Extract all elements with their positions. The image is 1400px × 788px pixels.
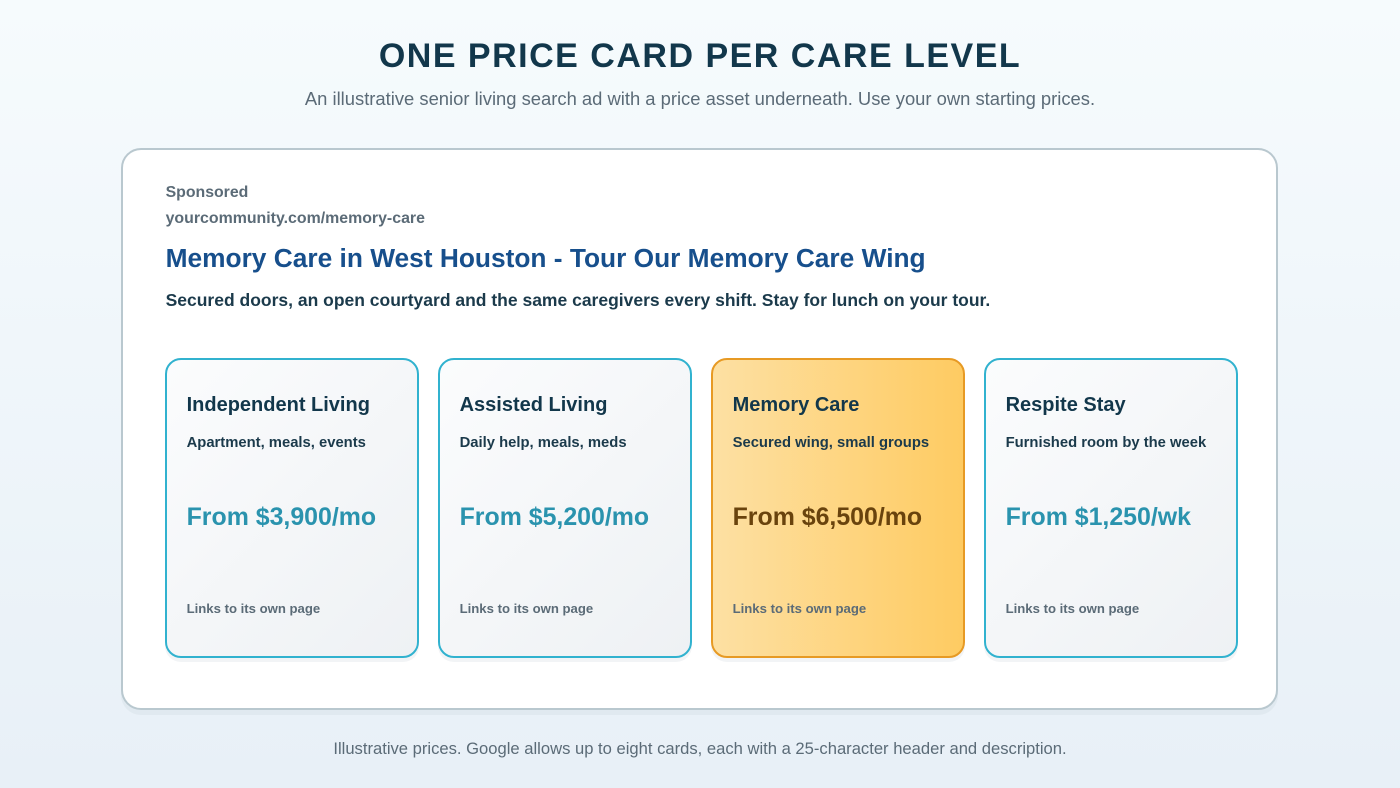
ad description: Secured doors, an open courtyard and the same caregivers every shift. Stay for lunch on your tour. xyxy=(166,290,990,310)
card description: Secured wing, small groups xyxy=(733,434,929,450)
footnote: Illustrative prices. Google allows up to eight cards, each with a 25-character header and description. xyxy=(333,739,1067,758)
card price: From $1,250/wk xyxy=(1006,503,1191,531)
title: ONE PRICE CARD PER CARE LEVEL xyxy=(379,37,1021,75)
ad headline: Memory Care in West Houston - Tour Our Memory Care Wing xyxy=(166,243,926,273)
subtitle: An illustrative senior living search ad with a price asset underneath. Use your own starting prices. xyxy=(305,88,1095,109)
card price: From $3,900/mo xyxy=(187,503,376,531)
card: respite stay xyxy=(984,358,1238,658)
card: assisted living xyxy=(438,358,692,658)
card link note: Links to its own page xyxy=(460,601,593,616)
card: memory care (highlighted) xyxy=(711,358,965,658)
card description: Furnished room by the week xyxy=(1006,434,1206,450)
ad label: sponsored: Sponsored xyxy=(166,184,248,201)
card price: From $5,200/mo xyxy=(460,503,649,531)
card heading: Independent Living xyxy=(187,394,370,416)
card link note: Links to its own page xyxy=(1006,601,1139,616)
card price: From $6,500/mo xyxy=(733,503,922,531)
card: independent living xyxy=(165,358,419,658)
panel: search ad xyxy=(121,148,1278,710)
card link note: Links to its own page xyxy=(733,601,866,616)
card description: Apartment, meals, events xyxy=(187,434,366,450)
card description: Daily help, meals, meds xyxy=(460,434,627,450)
card heading: Respite Stay xyxy=(1006,394,1126,416)
card heading: Memory Care xyxy=(733,394,859,416)
card link note: Links to its own page xyxy=(187,601,320,616)
card heading: Assisted Living xyxy=(460,394,607,416)
ad display URL: yourcommunity.com/memory-care xyxy=(166,210,425,227)
